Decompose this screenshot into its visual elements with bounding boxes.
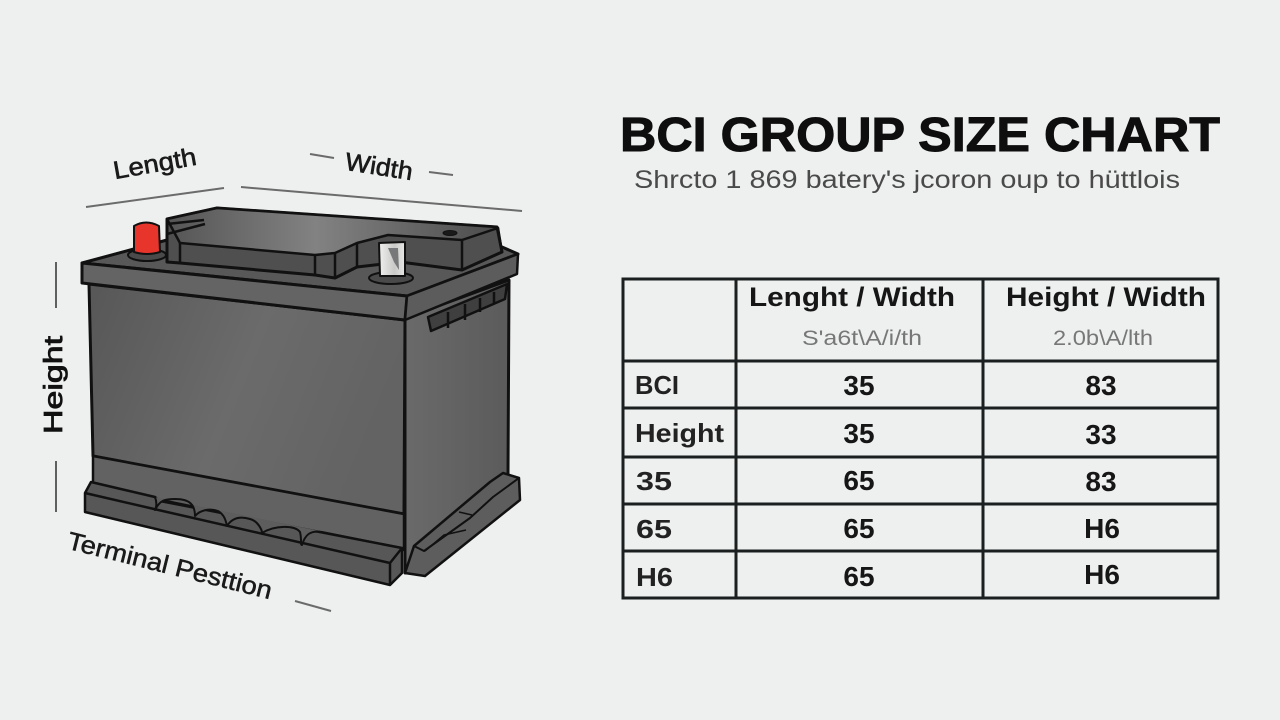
table row labels: Height	[635, 418, 724, 448]
white negative terminal	[369, 242, 413, 284]
label: Terminal Position: Terminal Pesttion	[64, 527, 275, 605]
title: BCI GROUP SIZE CHART	[620, 109, 1220, 162]
table values: height / width: H6	[1084, 559, 1120, 590]
table values: length / width: 35	[843, 370, 875, 401]
table values: height / width: 83	[1085, 466, 1117, 497]
label: Width	[241, 148, 522, 211]
label: Length: Length	[111, 143, 199, 185]
table header row: Height / Width	[1006, 282, 1206, 312]
table values: length / width: 65	[843, 561, 875, 592]
table row labels	[635, 370, 724, 592]
battery lower band	[93, 456, 404, 550]
table header row: S'a6t\A/i/th	[802, 327, 922, 350]
battery front face	[89, 284, 405, 514]
label: Length	[86, 143, 224, 207]
table row labels: H6	[636, 562, 673, 592]
table values: height / width: 83	[1085, 370, 1117, 401]
table values: length / width: 65	[843, 465, 875, 496]
label: Height: Height	[38, 335, 68, 434]
battery top rim	[82, 240, 518, 296]
battery lid	[167, 208, 502, 278]
table grid	[623, 279, 1218, 598]
size chart table	[623, 279, 1218, 598]
side vent ribs	[428, 284, 507, 331]
table values: height / width: 33	[1085, 419, 1117, 450]
label: Terminal Position	[64, 527, 331, 611]
table values: height / width	[1084, 370, 1120, 590]
battery right side face	[405, 280, 509, 573]
battery illustration	[82, 208, 520, 585]
table row labels: 35	[636, 466, 672, 496]
label: Width: Width	[343, 148, 415, 186]
right base ledge	[405, 473, 520, 576]
table header row: Lenght / Width	[749, 282, 955, 312]
table values: length / width	[843, 370, 875, 592]
table header row	[749, 282, 1206, 350]
front base ledge	[85, 482, 402, 585]
table header row: 2.0b\A/lth	[1053, 327, 1153, 350]
table row labels: 65	[636, 514, 672, 544]
table values: height / width: H6	[1084, 513, 1120, 544]
table row labels: BCI	[635, 370, 679, 400]
red positive terminal	[128, 222, 166, 261]
table values: length / width: 35	[843, 418, 875, 449]
table values: length / width: 65	[843, 513, 875, 544]
subtitle: Shrcto 1 869 batery's jcoron oup to hüttlois	[634, 166, 1180, 194]
